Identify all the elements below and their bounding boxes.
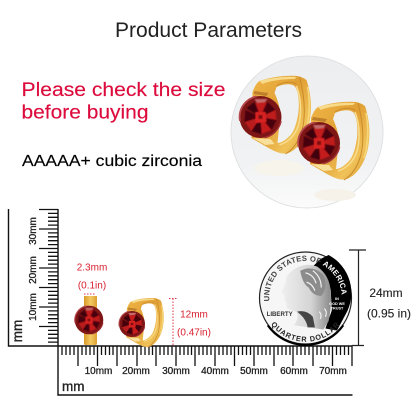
width dimension: (0.1in)	[78, 280, 106, 292]
earring side view	[119, 298, 164, 347]
vertical ruler labels: 20mm	[28, 256, 39, 284]
height dimension: (0.47in)	[177, 328, 211, 338]
width dimension	[77, 262, 107, 294]
width dimension: 2.3mm	[77, 262, 107, 274]
coin dimension label: (0.95 in)	[367, 306, 411, 320]
coin dimension label: 24mm	[369, 286, 403, 300]
coin lettering: UNITED STATES OF AMERICA	[264, 256, 347, 301]
horizontal ruler	[58, 346, 352, 395]
earring left	[240, 76, 311, 154]
horizontal ruler labels: 10mm	[85, 366, 112, 377]
coin lettering: LIBERTY	[267, 311, 293, 318]
earring front view	[75, 296, 103, 345]
horizontal axis unit: mm	[62, 379, 84, 394]
coin dimension line	[349, 250, 366, 346]
coin lettering	[264, 256, 347, 342]
horizontal ruler labels: 60mm	[280, 366, 308, 377]
product photo disc	[231, 56, 383, 208]
quarter dollar coin	[258, 251, 352, 346]
height dimension: 12mm	[180, 310, 208, 320]
coin lettering: TRUST	[331, 307, 344, 311]
red size warning: before buying	[22, 102, 148, 124]
vertical ruler labels: 10mm	[28, 293, 39, 321]
earring right	[298, 102, 369, 180]
material text: AAAAA+ cubic zirconia	[22, 153, 202, 170]
title: Product Parameters	[115, 18, 302, 42]
coin bust	[281, 265, 331, 329]
red size warning	[22, 79, 226, 124]
coin lettering: GOD WE	[329, 302, 345, 306]
coin lettering: QUARTER DOLLAR	[272, 322, 340, 342]
horizontal ruler labels: 70mm	[319, 366, 347, 377]
vertical axis unit: mm	[10, 320, 25, 342]
horizontal ruler labels: 30mm	[162, 366, 190, 377]
horizontal ruler labels: 40mm	[201, 366, 229, 377]
horizontal ruler labels: 20mm	[122, 366, 150, 377]
coin dimension label	[367, 286, 411, 320]
horizontal ruler labels: 50mm	[240, 366, 268, 377]
coin lettering: IN	[335, 297, 339, 301]
vertical ruler labels: 30mm	[28, 217, 39, 245]
horizontal ruler labels	[85, 366, 347, 377]
vertical ruler labels	[28, 217, 39, 321]
height dimension	[169, 298, 211, 346]
coin black field	[313, 255, 351, 331]
red size warning: Please check the size	[22, 79, 226, 101]
vertical ruler	[8, 209, 58, 346]
